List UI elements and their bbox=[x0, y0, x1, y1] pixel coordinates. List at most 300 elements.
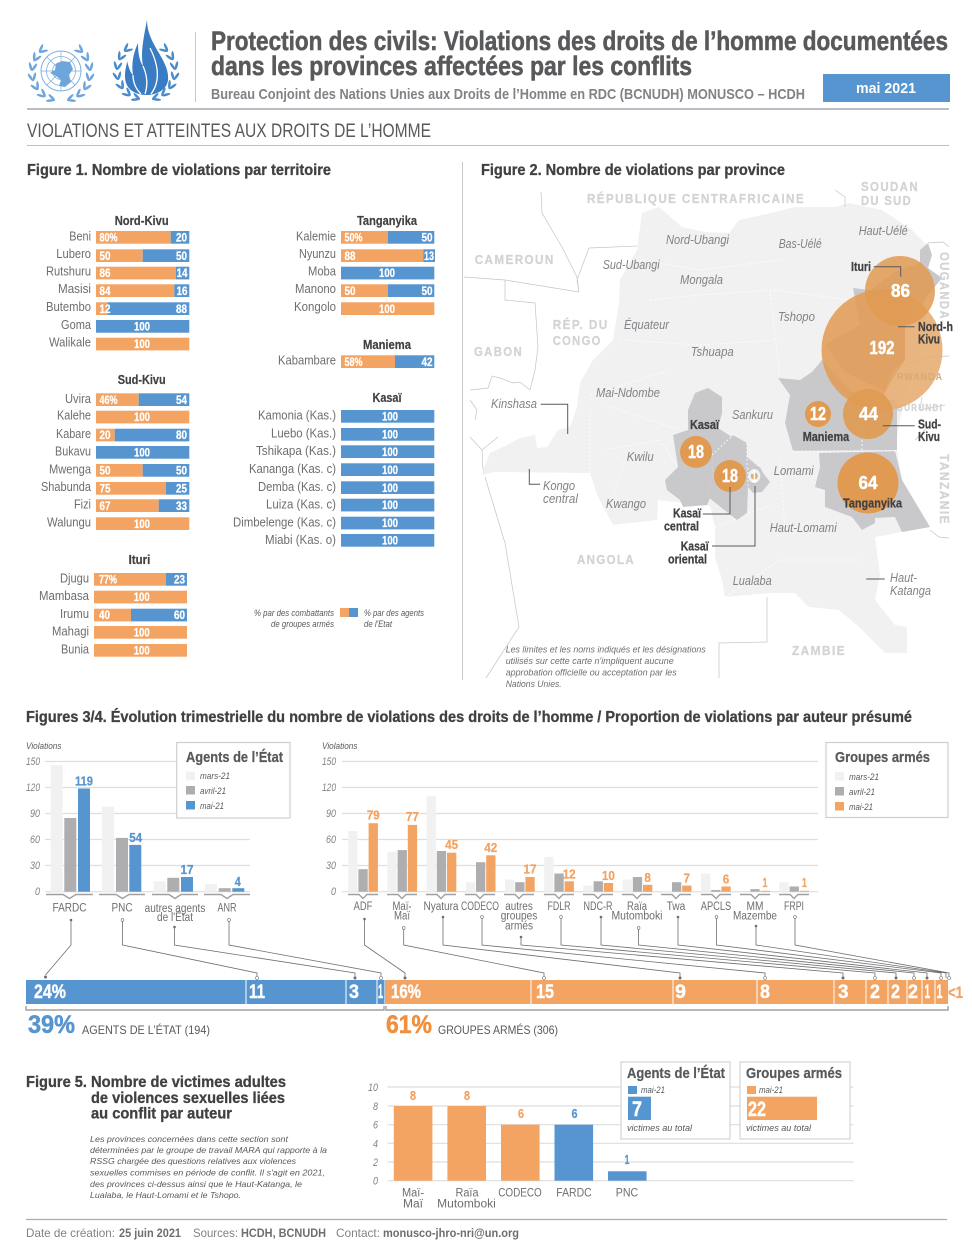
bars: MM Mazembe bbox=[733, 875, 777, 922]
row: Kalemie bbox=[296, 230, 434, 244]
bar group: Sud-Kivu bbox=[41, 373, 189, 531]
map: disclaimer: Nations Unies. bbox=[506, 679, 562, 690]
bar: armed groups segment: 16% bbox=[391, 982, 421, 1003]
bars: autres groupes armés: 17 bbox=[524, 862, 536, 876]
legend: Groupes armés bbox=[826, 742, 948, 818]
map: leader lines bbox=[529, 267, 915, 579]
row: Nyunzu: 13 bbox=[424, 251, 434, 263]
circle: Nord-Kivu bbox=[822, 290, 942, 410]
map: province labels: Sud-Ubangi bbox=[603, 258, 661, 272]
row: Masisi: 84 bbox=[100, 286, 111, 298]
text block: figure 5 note: Lualaba, le Haut-Lomami et le Tshopo. bbox=[90, 1190, 241, 1200]
header bbox=[27, 20, 950, 103]
bars: CODECO: 42 bbox=[484, 840, 497, 855]
y axis and gridlines: 0 bbox=[331, 886, 337, 898]
bar group: Maniema: Maniema bbox=[363, 338, 412, 352]
icon: UN emblem bbox=[27, 44, 95, 102]
row: Irumu: Irumu bbox=[60, 607, 89, 621]
bar: Raïa Mutomboki: Mutomboki bbox=[437, 1198, 496, 1210]
bars: ADF bbox=[348, 807, 380, 913]
row: Nyunzu bbox=[299, 247, 435, 263]
bar: armed groups segment: 15 bbox=[536, 982, 554, 1003]
legend card: Groupes armés: mai-21 bbox=[759, 1085, 783, 1095]
row: Kalehe: Kalehe bbox=[57, 408, 91, 422]
bars: PNC: PNC bbox=[112, 902, 132, 914]
map: disclaimer bbox=[506, 645, 706, 690]
row: Djugu: 77% bbox=[99, 574, 117, 586]
bracket: state agents total: 39% bbox=[28, 1011, 75, 1039]
row: Rutshuru: Rutshuru bbox=[46, 264, 91, 278]
bar group: Kasaï: Kasaï bbox=[372, 391, 402, 405]
row: Kabambare bbox=[278, 354, 434, 369]
map: circle values: 18 bbox=[688, 442, 704, 462]
bar: Raïa Mutomboki: Raïa bbox=[456, 1188, 479, 1200]
bar: CODECO: 6 bbox=[518, 1106, 524, 1121]
map: country labels: RÉP. DU bbox=[553, 317, 609, 332]
row: Fizi bbox=[74, 498, 189, 513]
map: province labels: Tshopo bbox=[778, 310, 815, 324]
bar: Raïa Mutomboki: 8 bbox=[464, 1088, 470, 1103]
bars: FDLR: FDLR bbox=[548, 901, 570, 913]
bars: Raïa Mutomboki: Raïa bbox=[627, 901, 647, 913]
row: Demba: Demba (Kas. c) bbox=[258, 480, 336, 494]
row: Irumu bbox=[60, 607, 187, 622]
row: Moba bbox=[308, 264, 434, 280]
map: province labels: Nord-Ubangi bbox=[666, 233, 730, 247]
legend card: Agents de l'État: mai-21 bbox=[641, 1085, 665, 1095]
row: Kamonia: Kamonia (Kas.) bbox=[258, 408, 336, 422]
map: province labels: central bbox=[543, 492, 579, 506]
row: Kalehe: 100 bbox=[134, 412, 150, 424]
bar: Raïa Mutomboki bbox=[437, 1088, 496, 1210]
map: province callouts: Nord-h bbox=[918, 320, 953, 334]
legend: Agents de l'État: avril-21 bbox=[200, 786, 226, 796]
legend card: Agents de l'État: victimes au total bbox=[627, 1123, 693, 1133]
chart: figure 5 axis: 0 bbox=[373, 1176, 379, 1188]
y axis and gridlines: Violations bbox=[322, 741, 358, 751]
connector lines from categories to proportion bar bbox=[44, 916, 950, 980]
map: circle values: 64 bbox=[858, 473, 878, 493]
bars: ADF: 79 bbox=[367, 807, 380, 822]
chart: figure 5 axis: 10 bbox=[368, 1082, 379, 1094]
map: province labels: Bas-Uélé bbox=[779, 237, 822, 251]
bars: FARDC: 119 bbox=[75, 774, 93, 789]
bars: autres agents de l'État bbox=[145, 862, 206, 924]
bar group: Nord-Kivu bbox=[46, 214, 189, 351]
bar: armed groups segment: 1 bbox=[936, 982, 943, 1003]
bars: FRPI: FRPI bbox=[784, 901, 804, 913]
row: Kabambare: Kabambare bbox=[278, 354, 336, 368]
row: Bunia bbox=[61, 642, 187, 658]
bars: APCLS: APCLS bbox=[701, 901, 732, 913]
map: province labels: Kwango bbox=[606, 497, 646, 511]
bars: Nyatura: 45 bbox=[445, 837, 458, 852]
bar: CODECO bbox=[498, 1106, 542, 1200]
bars: MM Mazembe: Mazembe bbox=[733, 910, 777, 922]
row: Tshikapa: Tshikapa (Kas.) bbox=[256, 444, 336, 458]
text block: figure 5 note: des provinces ci-dessus ainsi que le Haut-Katanga, le bbox=[90, 1179, 302, 1189]
row: Kabambare: 42 bbox=[422, 357, 432, 369]
map: province callouts: Tanganyika bbox=[843, 497, 903, 511]
map: province labels: Mai-Ndombe bbox=[596, 386, 660, 400]
map: country labels: CONGO bbox=[553, 334, 602, 348]
legend card: Agents de l'État: Agents de l’État bbox=[627, 1065, 725, 1082]
bars: MM Mazembe: MM bbox=[746, 901, 764, 913]
row: Kamonia bbox=[258, 408, 434, 424]
footer: Date de création: bbox=[26, 1226, 115, 1240]
chart: figure 5 axis: 2 bbox=[372, 1157, 378, 1169]
bars: Maï-Maï: Maï bbox=[394, 910, 411, 922]
bar: PNC: 1 bbox=[624, 1152, 630, 1167]
text block: figure 5 note: RSSG chargée des questions relatives aux violences bbox=[90, 1156, 297, 1166]
bar: armed groups segment: 9 bbox=[675, 982, 686, 1003]
row: Uvira bbox=[65, 392, 189, 407]
row: Bunia: Bunia bbox=[61, 642, 89, 656]
map: province callouts: Kivu bbox=[918, 332, 940, 346]
text block: figure 5 note: déterminées par le groupe de travail MARA qui rapporte à la bbox=[90, 1145, 327, 1155]
footer: monusco-jhro-nri@un.org bbox=[383, 1226, 519, 1240]
title: dans les provinces affectées par les conflits bbox=[211, 51, 692, 81]
bars: APCLS: 6 bbox=[723, 872, 729, 886]
circle: Kasaï oriental bbox=[748, 469, 760, 483]
row: Shabunda: 25 bbox=[176, 484, 188, 496]
row: Bukavu bbox=[55, 444, 189, 460]
bar group: Nord-Kivu: Nord-Kivu bbox=[115, 214, 169, 228]
y axis and gridlines: 150 bbox=[26, 756, 41, 768]
subtitle: Bureau Conjoint des Nations Unies aux Droits de l’Homme en RDC (BCNUDH) MONUSCO – HCDH bbox=[211, 86, 805, 103]
overlay: lighter area east of the border inside Nord-Kivu circle bbox=[884, 312, 942, 410]
row: Kamonia: 100 bbox=[382, 412, 398, 424]
bar: state agents segment: 3 bbox=[349, 982, 359, 1003]
footer: Contact: bbox=[336, 1226, 380, 1240]
bar: armed groups segment: 2 bbox=[908, 982, 918, 1003]
bracket: armed groups total: GROUPES ARMÉS (306) bbox=[438, 1022, 558, 1037]
map: province callouts: oriental bbox=[668, 552, 707, 566]
bars: autres groupes armés: groupes bbox=[501, 910, 537, 922]
legend: figure 1: de l'Etat bbox=[364, 619, 392, 629]
row: Demba bbox=[258, 480, 434, 495]
map: province callouts: Kivu bbox=[918, 430, 940, 444]
map: country labels bbox=[474, 180, 951, 658]
bracket: armed groups total bbox=[386, 1006, 948, 1039]
row: Butembo: 88 bbox=[176, 304, 188, 316]
row: Tshikapa: 100 bbox=[382, 447, 398, 459]
row: Beni: 80% bbox=[100, 232, 118, 244]
map: province callouts: Maniema bbox=[803, 430, 850, 444]
bar group: Ituri: Ituri bbox=[129, 553, 150, 567]
bars: Maï-Maï bbox=[387, 809, 419, 922]
row: Walungu: 100 bbox=[134, 519, 150, 531]
map: province callouts: Kasaï bbox=[690, 418, 719, 432]
bar: Maï-Maï bbox=[394, 1088, 432, 1210]
row: Mwenga: Mwenga bbox=[49, 462, 91, 476]
bar group: Tanganyika: Tanganyika bbox=[357, 214, 418, 228]
map: province callouts: Ituri bbox=[851, 260, 871, 274]
legend: Agents de l'État: mai-21 bbox=[200, 801, 224, 811]
row: Goma bbox=[61, 318, 189, 334]
bar: Maï-Maï: Maï bbox=[403, 1198, 424, 1210]
map: province labels: Kongo bbox=[543, 479, 575, 493]
row: Kongolo: 100 bbox=[379, 304, 395, 316]
row: Moba: Moba bbox=[308, 264, 336, 278]
row: Butembo: Butembo bbox=[46, 300, 91, 314]
bar: FARDC: 6 bbox=[572, 1106, 578, 1121]
bar: armed groups segment: 2 bbox=[891, 982, 900, 1003]
panel: figure 1 bbox=[27, 162, 435, 658]
legend card: Groupes armés: victimes au total bbox=[746, 1123, 812, 1133]
bars: PNC: 54 bbox=[129, 830, 143, 845]
label: less than one: <1 bbox=[948, 983, 963, 1002]
map: province labels: Kinshasa bbox=[491, 397, 537, 411]
row: Lubero bbox=[56, 247, 189, 263]
map: circle values: 12 bbox=[810, 404, 826, 424]
bar: PNC: PNC bbox=[616, 1188, 638, 1200]
bars: Nyatura: Nyatura bbox=[424, 901, 459, 913]
panel: figure 5 bbox=[26, 1062, 854, 1210]
row: Masisi: 16 bbox=[176, 286, 188, 298]
circle: Tanganyika bbox=[838, 452, 898, 514]
date badge: mai 2021 bbox=[856, 80, 916, 97]
row: Djugu: Djugu bbox=[60, 572, 89, 586]
map: country labels: CAMEROUN bbox=[475, 253, 555, 267]
row: Mwenga: 50 bbox=[100, 466, 110, 478]
bar: state agents segment bbox=[26, 980, 384, 1004]
bar: state agents segment: 1 bbox=[378, 982, 383, 1003]
row: Shabunda: 75 bbox=[100, 484, 111, 496]
bars: Maï-Maï: Maï- bbox=[392, 901, 412, 913]
bars: CODECO bbox=[461, 840, 499, 913]
bars: autres groupes armés: autres bbox=[505, 901, 533, 913]
map: country labels: BURUNDI bbox=[897, 403, 943, 414]
row: Mahagi bbox=[52, 624, 187, 640]
bar: armed groups segment bbox=[385, 980, 948, 1004]
row: Luebo: Luebo (Kas.) bbox=[271, 426, 336, 440]
text block: figure 5 note: sexuelles commises en période de conflit. Il s'agit en 2021, bbox=[90, 1168, 325, 1178]
row: Mahagi: 100 bbox=[134, 628, 150, 640]
row: Mwenga: 50 bbox=[176, 466, 187, 478]
row: Fizi: Fizi bbox=[74, 498, 91, 512]
row: Luiza: 100 bbox=[382, 500, 398, 512]
bars: CODECO: CODECO bbox=[461, 901, 499, 913]
row: Luebo bbox=[271, 426, 434, 442]
row: Beni: Beni bbox=[69, 230, 91, 244]
bar: armed groups segment: 1 bbox=[925, 982, 930, 1003]
chart: figure 5 axis: 8 bbox=[373, 1101, 379, 1113]
circle: Kasaï central bbox=[714, 460, 746, 492]
row: Manono bbox=[295, 282, 434, 298]
row: Lubero: 50 bbox=[100, 251, 110, 263]
row: Uvira: Uvira bbox=[65, 392, 91, 406]
row: Rutshuru: 86 bbox=[100, 268, 110, 280]
map: province labels: Haut-Lomami bbox=[770, 521, 838, 535]
chart: figure 5 axis: 6 bbox=[373, 1120, 379, 1132]
map: proportional circles bbox=[680, 256, 945, 514]
y axis and gridlines: 30 bbox=[326, 860, 337, 872]
row: Luiza bbox=[266, 498, 434, 512]
panel: armed groups bar chart bbox=[322, 741, 948, 932]
bar: FARDC: FARDC bbox=[556, 1188, 592, 1200]
icon: OHCHR flame bbox=[112, 20, 180, 101]
heading: figure 5: Figure 5. bbox=[26, 1074, 87, 1091]
bar group: Kasaï bbox=[233, 391, 434, 548]
legend card: Agents de l'État: 7 bbox=[632, 1098, 642, 1121]
row: Kalemie: 50% bbox=[344, 232, 362, 244]
bar: state agents segment: 11 bbox=[249, 982, 265, 1003]
y axis and gridlines bbox=[322, 741, 818, 898]
bars: MM Mazembe: 1 bbox=[762, 875, 768, 890]
chart: figure 5 axis: 4 bbox=[373, 1138, 378, 1150]
row: Manono: 50 bbox=[422, 286, 432, 298]
bars: ANR bbox=[204, 874, 250, 914]
map: circle values: 192 bbox=[870, 338, 894, 358]
row: Nyunzu: Nyunzu bbox=[299, 247, 336, 261]
legend: Agents de l'État bbox=[177, 742, 290, 818]
bars: Nyatura bbox=[424, 796, 459, 913]
map: Rwanda label: RWANDA bbox=[897, 372, 943, 383]
y axis and gridlines: 30 bbox=[30, 860, 41, 872]
map: country labels: ZAMBIE bbox=[792, 644, 846, 658]
legend: Groupes armés: avril-21 bbox=[849, 787, 875, 797]
map: province callouts: Kasaï bbox=[673, 507, 701, 521]
heading: figure 5 bbox=[26, 1074, 286, 1122]
map: province labels: Lomami bbox=[774, 464, 815, 478]
legend: Groupes armés: mai-21 bbox=[849, 802, 873, 812]
row: Dimbelenge: Dimbelenge (Kas. c) bbox=[233, 516, 336, 530]
row: Kalemie: 50 bbox=[422, 232, 432, 244]
row: Miabi: 100 bbox=[382, 536, 398, 548]
bars: PNC bbox=[99, 807, 145, 914]
map: DRC base bbox=[464, 190, 949, 678]
row: Lubero: Lubero bbox=[56, 247, 91, 261]
heading: figure 5: de violences sexuelles liées bbox=[91, 1090, 285, 1107]
map: province labels bbox=[491, 224, 931, 598]
map: disclaimer: utilisés sur cette carte n'impliquent aucune bbox=[506, 656, 674, 667]
map: country labels: ANGOLA bbox=[577, 553, 635, 567]
bars: NDC-R bbox=[583, 868, 615, 913]
footer: HCDH, BCNUDH bbox=[241, 1226, 326, 1240]
row: Mambasa: 100 bbox=[134, 592, 150, 604]
circle: Maniema bbox=[805, 401, 831, 427]
row: Manono: 50 bbox=[344, 286, 356, 298]
row: Moba: 100 bbox=[379, 268, 395, 280]
y axis and gridlines: 90 bbox=[30, 808, 41, 820]
row: Irumu: 60 bbox=[174, 610, 185, 622]
map: country labels: TANZANIE bbox=[937, 454, 951, 525]
row: Luebo: 100 bbox=[382, 430, 398, 442]
row: Uvira: 54 bbox=[176, 395, 188, 407]
bar: FARDC bbox=[554, 1106, 593, 1200]
circle: Sud-Kivu bbox=[843, 389, 893, 439]
row: Bukavu: Bukavu bbox=[55, 444, 91, 458]
footer: 25 juin 2021 bbox=[119, 1226, 181, 1240]
row: Kongolo bbox=[294, 300, 434, 316]
bars: Maï-Maï: 77 bbox=[406, 809, 419, 824]
circle: Kasaï bbox=[680, 436, 712, 468]
row: Djugu bbox=[60, 572, 187, 586]
row: Kabare: 80 bbox=[176, 430, 187, 442]
bars: ADF: ADF bbox=[354, 901, 372, 913]
bars: FARDC bbox=[46, 765, 93, 914]
row: Beni: 20 bbox=[176, 232, 187, 244]
bars: autres groupes armés bbox=[501, 862, 537, 932]
bar group: Tanganyika bbox=[294, 214, 435, 316]
legend card: Agents de l'État bbox=[621, 1062, 730, 1139]
row: Bukavu: 100 bbox=[134, 448, 150, 460]
row: Bunia: 100 bbox=[134, 646, 150, 658]
row: Walungu: Walungu bbox=[47, 516, 91, 530]
map: province labels: Katanga bbox=[890, 584, 931, 598]
bars: NDC-R: 10 bbox=[602, 868, 615, 883]
map: disclaimer: approbation officielle ou acceptation par les bbox=[506, 668, 677, 678]
row: Goma: Goma bbox=[61, 318, 91, 332]
row: Butembo bbox=[46, 300, 189, 316]
bracket: state agents total bbox=[26, 1006, 384, 1039]
row: Kabare bbox=[56, 427, 189, 442]
chart: figure 5 axis bbox=[368, 1082, 854, 1188]
row: Kananga bbox=[249, 462, 434, 477]
map: province labels: Haut-Uélé bbox=[859, 224, 908, 238]
footer: Sources: bbox=[193, 1226, 238, 1240]
bars: NDC-R: NDC-R bbox=[584, 901, 612, 913]
heading: figures 3/4: Figures 3/4. Évolution trimestrielle du nombre de violations des droits de l’homme / Proportion de violations par auteur présumé bbox=[26, 709, 912, 726]
bar: Maï-Maï: 8 bbox=[410, 1088, 416, 1103]
heading: figure 1: Figure 1. Nombre de violations par territoire bbox=[27, 162, 331, 179]
map: province callouts: Kasaï bbox=[681, 540, 709, 554]
map: country labels: RÉPUBLIQUE CENTRAFRICAINE bbox=[587, 191, 805, 206]
map: province labels: Lualaba bbox=[733, 574, 772, 588]
bars: autres groupes armés: armés bbox=[505, 920, 533, 932]
row: Manono: Manono bbox=[295, 282, 336, 296]
heading: figure 2: Figure 2. Nombre de violations par province bbox=[481, 162, 785, 179]
bars: autres agents de l'État: autres agents bbox=[145, 903, 206, 915]
row: Walikale: 100 bbox=[134, 339, 150, 351]
bar: armed groups segment: 8 bbox=[760, 982, 770, 1003]
row: Djugu: 23 bbox=[174, 574, 185, 586]
row: Goma: 100 bbox=[134, 322, 150, 334]
legend: Agents de l'État: mars-21 bbox=[200, 771, 230, 781]
bar: PNC bbox=[608, 1152, 647, 1200]
row: Masisi bbox=[58, 282, 189, 298]
bar group: Maniema bbox=[278, 338, 434, 369]
bars: APCLS bbox=[701, 872, 732, 913]
legend: figure 1 bbox=[254, 608, 424, 629]
map: province labels: Kwilu bbox=[627, 450, 654, 464]
row: Lubero: 50 bbox=[176, 251, 187, 263]
bars: Raïa Mutomboki: 8 bbox=[644, 870, 651, 885]
bars: Twa: Twa bbox=[667, 901, 686, 913]
y axis and gridlines: 90 bbox=[326, 808, 337, 820]
y axis and gridlines bbox=[26, 741, 250, 898]
map: country labels: OUGANDA bbox=[937, 252, 951, 320]
bars: ANR: 4 bbox=[235, 874, 241, 889]
bar: state agents segment: 24% bbox=[34, 982, 66, 1003]
legend: figure 1: % par des combattants bbox=[254, 608, 334, 618]
legend: Agents de l'État: Agents de l’État bbox=[186, 749, 283, 766]
row: Demba: 100 bbox=[382, 483, 398, 495]
map: circle values: 1 bbox=[752, 469, 757, 486]
map: province labels: Équateur bbox=[624, 317, 670, 332]
map: province callouts: central bbox=[664, 520, 699, 534]
row: Fizi: 33 bbox=[176, 501, 187, 513]
row: Rutshuru bbox=[46, 264, 189, 280]
row: Luiza: Luiza (Kas. c) bbox=[266, 498, 336, 512]
bars: FRPI: 1 bbox=[802, 875, 807, 890]
bars: FDLR bbox=[544, 857, 576, 913]
bar group: Ituri bbox=[39, 553, 187, 658]
bracket: state agents total: AGENTS DE L’ÉTAT (194) bbox=[82, 1022, 210, 1037]
bars: autres agents de l'État: 17 bbox=[180, 862, 194, 877]
bars: FRPI bbox=[779, 875, 809, 913]
